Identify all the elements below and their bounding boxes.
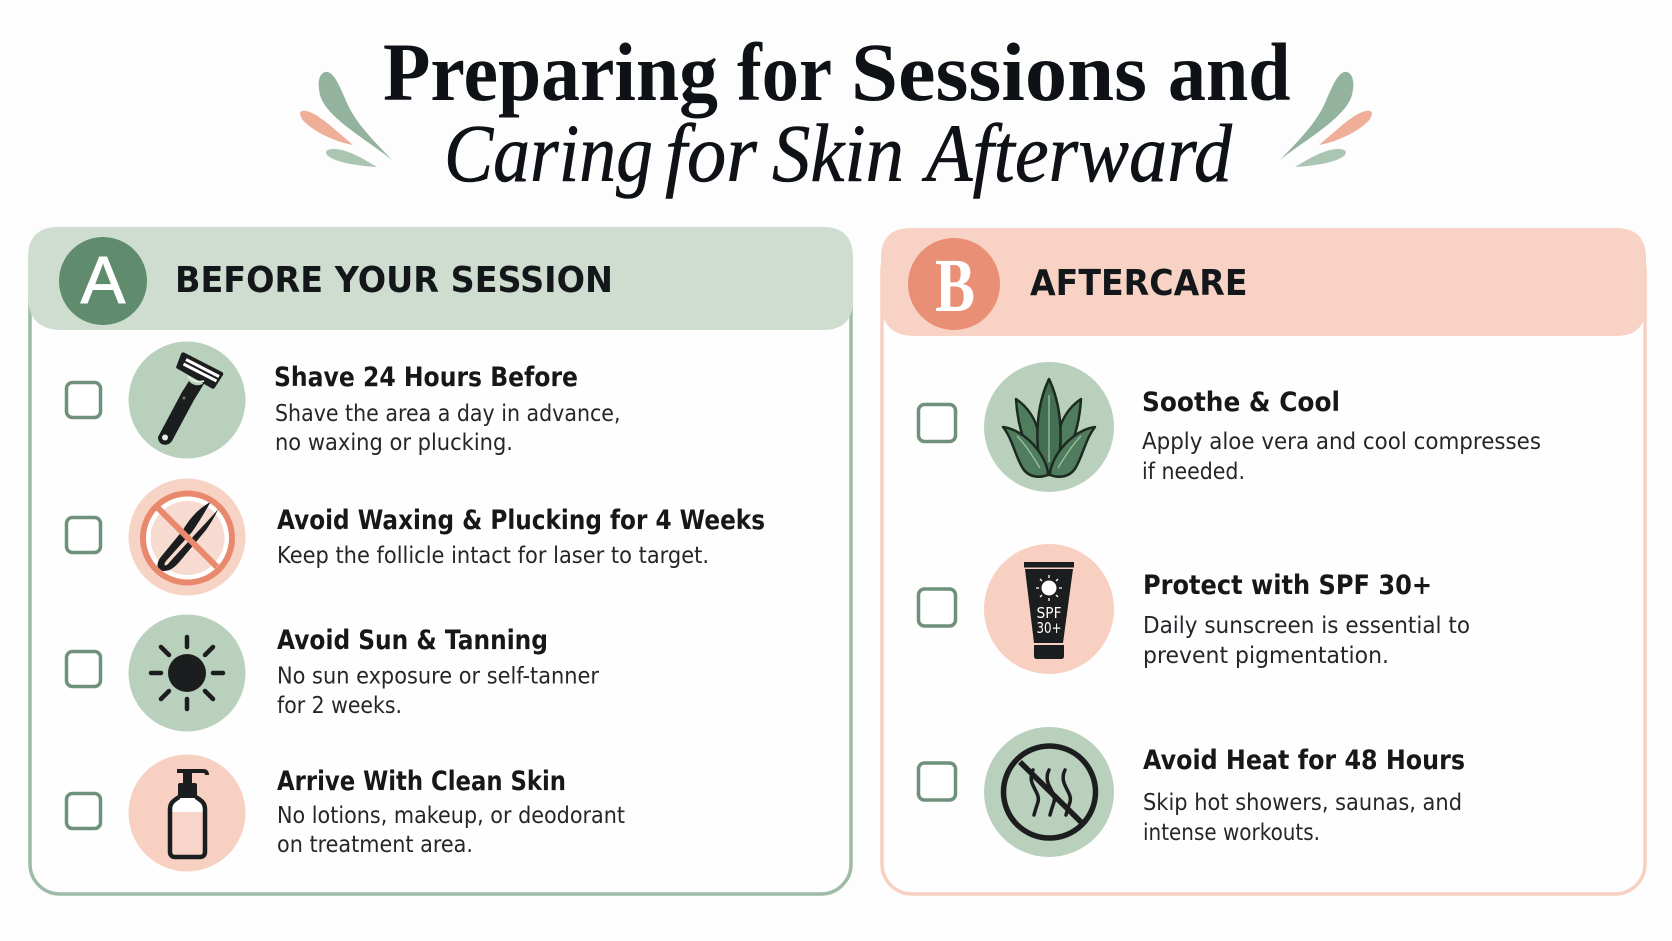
title: for bbox=[665, 107, 758, 199]
panel header: before your session bbox=[28, 227, 853, 330]
item: soothe and cool: Apply aloe vera and cool compresses bbox=[1142, 427, 1541, 455]
title: Afterward bbox=[921, 107, 1232, 199]
title: and bbox=[1168, 26, 1290, 118]
item: soothe and cool: Soothe & Cool bbox=[1142, 387, 1340, 418]
panel header: before your session: BEFORE YOUR SESSION bbox=[175, 260, 613, 301]
item: soothe and cool bbox=[918, 362, 1541, 492]
item: avoid waxing and plucking: Avoid Waxing & Plucking for 4 Weeks bbox=[277, 505, 765, 536]
icon: aloe plant bbox=[1003, 379, 1095, 477]
icon: sunscreen tube bbox=[1024, 562, 1074, 659]
item: avoid sun and tanning bbox=[66, 614, 599, 732]
panel header: aftercare bbox=[881, 228, 1646, 336]
icon: sunscreen tube: SPF bbox=[1036, 604, 1062, 622]
item: avoid sun and tanning: No sun exposure or self-tanner bbox=[277, 662, 599, 690]
item: protect with spf 30+: Daily sunscreen is essential to bbox=[1143, 611, 1470, 639]
item: shave 24 hours before: Shave 24 Hours Before bbox=[274, 362, 578, 393]
item: avoid sun and tanning: for 2 weeks. bbox=[277, 691, 402, 719]
icon: left leaf sprig bbox=[300, 72, 392, 167]
item: arrive with clean skin: No lotions, makeup, or deodorant bbox=[277, 801, 625, 829]
title: Sessions bbox=[851, 26, 1147, 118]
panel header: before your session: A bbox=[81, 243, 126, 318]
item: avoid waxing and plucking bbox=[66, 478, 765, 596]
item: soothe and cool: if needed. bbox=[1142, 457, 1245, 485]
item: avoid waxing and plucking: Keep the follicle intact for laser to target. bbox=[277, 541, 709, 569]
panel header: aftercare: AFTERCARE bbox=[1030, 263, 1248, 304]
item: protect with spf 30+ bbox=[918, 544, 1470, 674]
title: Preparing bbox=[383, 26, 718, 118]
icon: pump bottle bbox=[170, 769, 209, 857]
icon: crossed-out tweezers bbox=[143, 494, 232, 582]
title: Skin bbox=[772, 107, 904, 199]
item: avoid heat for 48 hours: intense workouts. bbox=[1143, 818, 1320, 846]
panel: before your session bbox=[28, 227, 853, 894]
item: avoid sun and tanning: Avoid Sun & Tanning bbox=[277, 625, 548, 656]
panel header: aftercare: B bbox=[935, 244, 975, 328]
item: protect with spf 30+: prevent pigmentation. bbox=[1143, 641, 1389, 669]
item: arrive with clean skin: Arrive With Clean Skin bbox=[277, 766, 566, 797]
title: for bbox=[737, 26, 832, 118]
icon: razor bbox=[158, 352, 223, 445]
icon: no heat bbox=[1004, 746, 1096, 838]
title bbox=[383, 26, 1290, 199]
item: arrive with clean skin: on treatment area. bbox=[277, 830, 473, 858]
item: avoid heat for 48 hours: Skip hot showers, saunas, and bbox=[1143, 788, 1462, 816]
item: shave 24 hours before: Shave the area a day in advance, bbox=[275, 399, 620, 427]
panel: aftercare bbox=[881, 228, 1646, 894]
item: arrive with clean skin bbox=[66, 754, 625, 872]
item: protect with spf 30+: Protect with SPF 30+ bbox=[1143, 570, 1432, 601]
icon: sunscreen tube: 30+ bbox=[1036, 619, 1062, 637]
item: shave 24 hours before: no waxing or plucking. bbox=[275, 428, 513, 456]
item: avoid heat for 48 hours: Avoid Heat for 48 Hours bbox=[1143, 745, 1465, 776]
icon: sun bbox=[151, 637, 223, 709]
item: shave 24 hours before bbox=[66, 342, 620, 458]
item: avoid heat for 48 hours bbox=[918, 727, 1465, 857]
title: Caring bbox=[444, 107, 653, 199]
icon: right leaf sprig bbox=[1280, 72, 1372, 167]
